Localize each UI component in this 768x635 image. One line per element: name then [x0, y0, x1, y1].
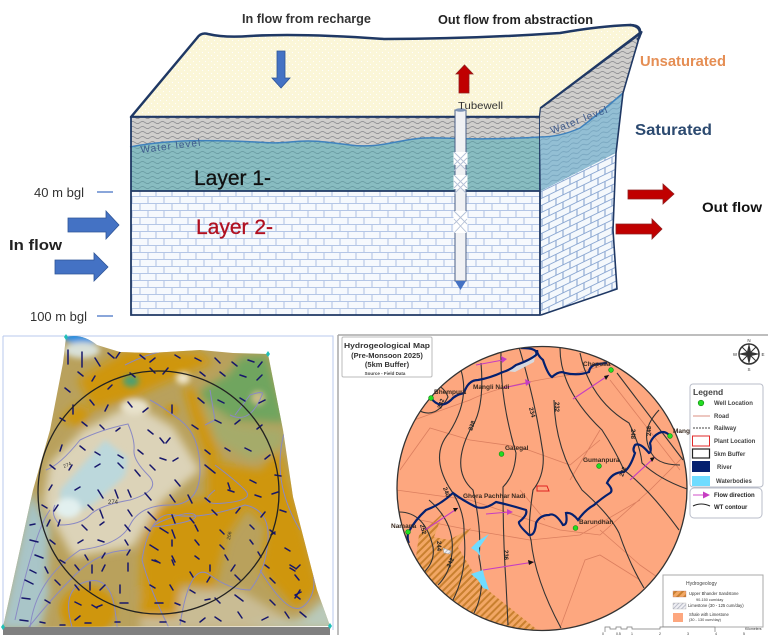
- contour labels: 242: [437, 398, 447, 410]
- selection frame: [3, 336, 333, 630]
- arrow: in flow lower: [55, 253, 108, 281]
- legend: Waterbodies: [716, 479, 752, 485]
- scale bar: Kilometers: [745, 627, 762, 631]
- legend: Plant Location: [714, 439, 756, 445]
- legend: Railway: [714, 426, 737, 432]
- side face: saturated: [540, 93, 623, 191]
- contour labels: 236: [502, 550, 508, 561]
- flow arrow heads: [501, 356, 531, 515]
- tubewell: [454, 108, 468, 290]
- place names: Chapolia: [583, 361, 611, 368]
- contour flow end heads: [453, 375, 655, 565]
- arrow: out flow lower: [616, 219, 662, 239]
- title box: (5km Buffer): [365, 360, 410, 369]
- hydrogeology legend: Hydrogeology: [686, 581, 717, 587]
- place names: Galegal: [505, 445, 529, 452]
- sandstone hatched zone: [416, 513, 538, 630]
- legend: 5km Buffer: [714, 452, 746, 458]
- legend: Road: [714, 414, 729, 420]
- contour labels: 242: [446, 557, 456, 569]
- front face: brick Layer 2: [131, 191, 540, 315]
- side face outline: [541, 32, 642, 315]
- limestone strip by river: [508, 352, 536, 372]
- arrow: in flow upper: [68, 211, 119, 239]
- contour labels: [418, 398, 653, 569]
- label: saturated: Saturated: [635, 122, 712, 139]
- hydrogeological map: [338, 335, 768, 635]
- label: out flow from abstraction: Out flow from abstraction: [438, 12, 593, 27]
- front face outline: [131, 117, 540, 315]
- place names: Barundhan: [579, 519, 613, 526]
- depth tick marks: [97, 192, 113, 316]
- contour labels: 248: [629, 429, 635, 440]
- title box: (Pre-Monsoon 2025): [351, 351, 423, 360]
- label: layer 2: Layer 2-: [196, 216, 273, 239]
- label: 100 m bgl: 100 m bgl: [30, 309, 87, 324]
- side face water level line: [540, 93, 623, 137]
- place names: Gumanpura: [583, 457, 620, 464]
- 5 km buffer circle: [38, 371, 279, 614]
- water bodies: [471, 534, 489, 590]
- flow direction arrows: [425, 360, 655, 570]
- water table contours: [15, 352, 314, 635]
- place names: Mangli Nadi: [473, 384, 510, 391]
- label: unsaturated: Unsaturated: [640, 53, 726, 70]
- side face: unsaturated: [540, 34, 640, 137]
- hydrogeology legend: (30 - 130 cum/day): [689, 618, 722, 622]
- map frame: [338, 335, 768, 635]
- north arrow compass: [733, 338, 765, 372]
- front face: unsaturated wavy layer: [131, 117, 540, 147]
- label: layer 1: Layer 1-: [194, 167, 271, 190]
- north arrow compass: E: [761, 352, 765, 357]
- contour label 274 left: 274: [63, 461, 73, 470]
- rivers: [408, 348, 670, 543]
- roads: [396, 355, 690, 628]
- hydrogeology legend: Shale with Limestone: [689, 612, 729, 617]
- hydrogeology legend: [663, 575, 763, 627]
- side face: brick: [541, 153, 617, 315]
- water table contours: [399, 347, 690, 628]
- conceptual aquifer block diagram: [9, 11, 762, 324]
- place names: Ghora Pachhar Nadi: [463, 493, 526, 500]
- terrain base and colour zones: [0, 328, 340, 635]
- legend: WT contour: [714, 505, 748, 511]
- contour labels: 248: [647, 425, 653, 436]
- contour label 274 lower: 274: [108, 500, 119, 506]
- arrow: abstraction out flow: [456, 65, 473, 93]
- legend: River: [717, 465, 733, 471]
- place names: Namana: [391, 523, 417, 530]
- contour labels: 252: [418, 524, 427, 536]
- buffer circle outline: [397, 346, 687, 630]
- legend: Well Location: [714, 401, 753, 407]
- north arrow compass: N: [747, 338, 751, 343]
- contour labels: 232: [619, 466, 629, 478]
- corner curl: [630, 25, 640, 40]
- title box: [342, 337, 432, 377]
- hydrogeology legend: 90-150 cum/day: [696, 598, 723, 602]
- contour labels: 234: [527, 407, 536, 419]
- title box: Source - Field Data: [365, 371, 406, 376]
- selection handles: [1, 334, 332, 630]
- north arrow compass: S: [747, 367, 751, 372]
- legend: Legend: [693, 387, 723, 397]
- top surface: unsaturated soil: [131, 25, 640, 117]
- well locations: [406, 368, 672, 534]
- flow direction arrows: [20, 350, 306, 625]
- hydrogeology legend: Upper Bhander Sandstone: [689, 591, 739, 596]
- north arrow compass: W: [733, 352, 738, 357]
- base strip: [3, 627, 330, 635]
- label: tubewell: Tubewell: [458, 101, 503, 112]
- legend: Flow direction: [714, 493, 755, 499]
- limestone patch: [443, 548, 451, 554]
- legend: [690, 384, 763, 518]
- arrow: recharge in flow: [272, 51, 290, 88]
- label: out flow: Out flow: [702, 199, 762, 215]
- 3D water table surface map: [0, 328, 340, 635]
- place names: Mangli: [673, 428, 694, 435]
- label: side water level: Water level: [549, 105, 609, 137]
- plant location: [537, 486, 549, 491]
- title box: Hydrogeological Map: [344, 341, 430, 350]
- 5 km buffer disc: [397, 346, 687, 630]
- label: 40 m bgl: 40 m bgl: [34, 185, 84, 200]
- contour labels: 244: [435, 541, 441, 552]
- place names: [391, 361, 694, 530]
- contour labels: 232: [553, 402, 559, 413]
- hydrogeology legend: Limestone (30 - 125 cum/day): [688, 603, 744, 608]
- contour labels: 238: [468, 420, 478, 432]
- front face water level line: [130, 137, 540, 147]
- front face: saturated Layer 1: [131, 137, 540, 191]
- place names: Bhempura: [434, 389, 467, 396]
- contour labels: 240: [441, 487, 450, 499]
- arrow: out flow upper: [628, 184, 674, 204]
- scale bar: [602, 627, 762, 635]
- label: in flow: In flow: [9, 237, 62, 254]
- contour label 266: 266: [226, 531, 233, 540]
- label: in flow from recharge: In flow from recharge: [242, 11, 371, 26]
- label: front water level: Water level: [140, 138, 201, 156]
